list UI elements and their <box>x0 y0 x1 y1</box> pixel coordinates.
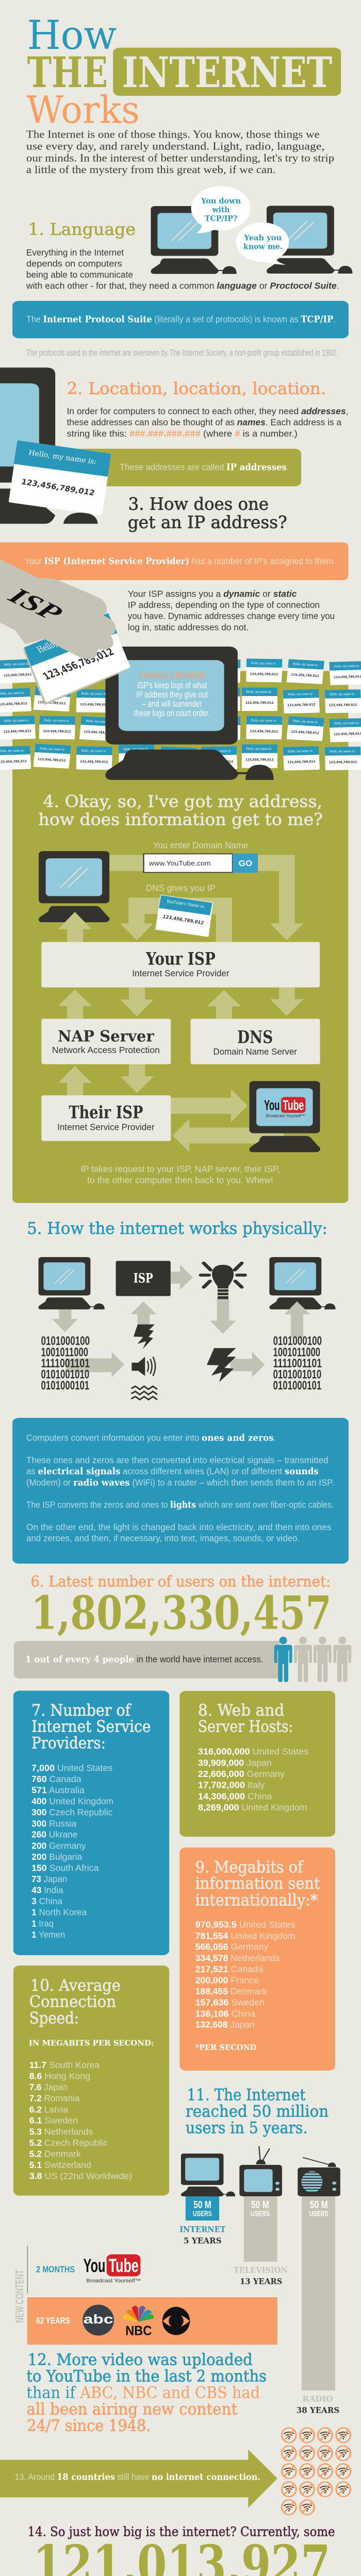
name tag wall: Hello, my name is: <box>293 719 318 724</box>
name tag wall: 123,456,789,012 <box>245 701 273 705</box>
text: dynamic or static: log in, static addresses do not. <box>128 622 249 633</box>
name tag wall: 123,456,789,012 <box>250 729 278 733</box>
heading: 12. video: all been airing new content <box>26 2400 238 2418</box>
callout: TCP/IP: The Internet Protocol Suite (literally a set of protocols) is known as TCP/IP. <box>26 314 336 325</box>
box: their ISP: Internet Service Provider <box>57 1122 155 1132</box>
small name tag: YouTube: YouTube's Name is: <box>166 899 206 909</box>
name tag wall: 123,456,789,012 <box>208 730 236 734</box>
icon: light bulb <box>201 1263 245 1299</box>
name tag wall: Hello, my name is: <box>81 749 107 753</box>
icon: large computer and name tag: Hello, my name is: <box>28 448 97 466</box>
binary left: 0101000100 <box>41 1334 90 1348</box>
panel: 9. megabits: 970,953.5 United States <box>195 1920 295 1930</box>
panel: 7. ISPs: 1 Yemen <box>31 1930 65 1940</box>
text: language: with each other - for that, they need a common language or Proctocol Suite. <box>26 281 339 291</box>
panel: how it works explanation: Computers convert information you enter into ones and zeros. <box>26 1433 276 1443</box>
panel: 9. megabits: 217,521 Canada <box>195 1964 263 1974</box>
heading: 12. video: 12. More video was uploaded <box>28 2350 253 2369</box>
callout: ISP <box>0 543 348 580</box>
panel: 7. ISPs: 260 Ukrane <box>31 1829 77 1840</box>
name tag wall: 123,456,789,012 <box>38 700 66 705</box>
panel: 10. connection speed: 11.7 South Korea <box>29 2060 100 2070</box>
name tag wall: 123,456,789,012 <box>0 701 27 706</box>
name tag wall: 123,456,789,012 <box>80 759 108 764</box>
panel: 10. connection speed: 5.2 Czech Republic <box>29 2138 108 2148</box>
panel: 10. connection speed: 8.6 Hong Kong <box>29 2071 90 2081</box>
panel: 9. megabits: 136,106 China <box>195 2009 256 2019</box>
name tag wall: Hello, my name is: <box>44 718 70 722</box>
icon: computer with YouTube logo: Broadcast Yourself™ <box>266 1114 305 1118</box>
bar: television 13 years <box>234 2146 288 2286</box>
text: language: being able to communicate <box>26 270 133 280</box>
name tag wall: 123,456,789,012 <box>43 729 71 733</box>
bar: internet 5 years: USERS <box>193 2209 212 2218</box>
icon: computer with YouTube logo: Tube <box>283 1097 304 1113</box>
chart: new content axis and YouTube row: Broadcast Yourself™ <box>86 2278 141 2284</box>
text: language: Everything in the Internet <box>26 248 124 258</box>
name tag wall: 123,456,789,012 <box>245 758 273 761</box>
binary left: 1111001101 <box>41 1357 90 1370</box>
icon: big computer with warning: IP address they give out <box>136 690 208 700</box>
name tag wall: Hello, my name is: <box>4 718 29 723</box>
panel: how it works explanation <box>12 1418 349 1564</box>
icon: left computer <box>39 1257 105 1310</box>
panel: 9. megabits: 9. Megabits of <box>195 1858 304 1876</box>
browser address bar: GO <box>238 859 252 868</box>
panel: 7. ISPs: 3 China <box>31 1896 63 1906</box>
panel: 9. megabits: 781,554 United Kingdom <box>195 1931 296 1941</box>
physical flow arrows <box>52 1265 265 1377</box>
panel: 10. connection speed: 6.2 Latvia <box>29 2105 69 2115</box>
name tag wall: 123,456,789,012 <box>3 729 31 734</box>
panel: 7. ISPs: Providers: <box>31 1734 106 1752</box>
illustration: two computers talking <box>151 186 352 274</box>
panel: 9. megabits: 566,056 Germany <box>195 1942 269 1952</box>
callout: IP addresses <box>55 449 301 486</box>
flow arrows <box>58 855 303 1152</box>
icon: big computer with warning: ISP's keep logs of what <box>137 681 207 690</box>
illustration: two computers talking: TCP/IP? <box>205 214 237 223</box>
box: NAP server: NAP Server <box>58 1028 155 1045</box>
name tag wall: Hello, my name is: <box>288 749 313 753</box>
name tag wall: 123,456,789,012 <box>250 672 278 676</box>
heading: 1. Language: 1. Language <box>28 220 136 239</box>
icon: big computer with warning: CRIMINALS BEWARE! <box>139 671 205 681</box>
caption: whew <box>80 1164 280 1185</box>
binary right: 1111001101 <box>273 1357 322 1370</box>
label: you enter domain name: You enter Domain Name <box>153 840 248 851</box>
panel: 7. ISPs: 1 Iraq <box>31 1919 54 1929</box>
icon: big computer with warning <box>105 647 274 780</box>
bar: radio 38 years: RADIO <box>302 2394 333 2404</box>
box: ISP <box>116 1261 171 1296</box>
panel: 7. ISPs: 150 South Africa <box>31 1863 99 1873</box>
caption: whew: to the other computer then back to you. Whew! <box>87 1175 273 1185</box>
panel: 7. ISPs: 7. Number of <box>31 1701 132 1720</box>
name tag wall: Hello, my name is: <box>40 689 65 694</box>
panel: 8. hosts <box>179 1691 335 1837</box>
heading: 3. How does one get an IP address?: 3. How does one <box>128 495 269 514</box>
name tag wall: 123,456,789,012 <box>84 730 112 735</box>
panel: 9. megabits: 200,000 France <box>195 1975 259 1986</box>
name tag wall: 123,456,789,012 <box>123 758 151 762</box>
panel: 8. hosts: 39,909,000 Japan <box>198 1758 272 1768</box>
intro text <box>26 129 334 176</box>
binary right <box>273 1334 322 1393</box>
illustration: two computers talking: Yeah you <box>244 234 282 243</box>
panel: 7. ISPs: 571 Australia <box>31 1785 85 1795</box>
icon: small lightning bolt <box>134 1325 155 1349</box>
name tag wall: 123,456,789,012 <box>291 672 319 678</box>
panel: 7. ISPs: 300 Russia <box>31 1819 77 1829</box>
box: your ISP: Your ISP <box>145 949 216 969</box>
name tag wall: 123,456,789,012 <box>205 759 233 764</box>
title: Works <box>26 89 140 132</box>
icon: large lightning bolt <box>207 1348 236 1382</box>
heading: 12. video: than if ABC, NBC and CBS had <box>26 2383 260 2402</box>
name tag wall: 123,456,789,012 <box>287 702 316 707</box>
name tag wall: Hello, my name is: <box>81 691 107 696</box>
name tag wall: Hello, my name is: <box>0 749 24 753</box>
text: language: depends on computers <box>26 259 122 269</box>
name tag wall: Hello, my name is: <box>0 690 25 696</box>
bar: television 13 years: TELEVISION <box>234 2265 288 2275</box>
panel: 7. ISPs: 200 Germany <box>31 1841 86 1851</box>
browser address bar <box>144 854 258 873</box>
icon: computer with YouTube logo <box>249 1081 320 1152</box>
text: dynamic or static: Your ISP assigns you a dynamic or static <box>128 589 297 599</box>
name tag wall: 123,456,789,012 <box>163 759 192 765</box>
panel: 7. ISPs: 1 North Korea <box>31 1907 87 1918</box>
icon: radio waves <box>131 1386 157 1400</box>
box: NAP server <box>41 1019 171 1064</box>
icon: four people <box>274 1637 351 1682</box>
box: your ISP <box>41 942 320 988</box>
panel: 9. megabits: 334,578 Netherlands <box>195 1953 280 1963</box>
heading: 11. 50 million users: users in 5 years. <box>186 2119 307 2137</box>
caption: whew: IP takes request to your ISP, NAP server, their ISP, <box>80 1164 280 1174</box>
bar: internet 5 years: INTERNET <box>179 2225 226 2234</box>
panel: 7. ISPs: Internet Service <box>31 1717 151 1736</box>
heading: 11. 50 million users: 11. The Internet <box>187 2086 306 2104</box>
box: DNS: DNS <box>237 1027 273 1047</box>
chart: 62 years networks row: abc <box>84 2313 113 2327</box>
callout: 1 in 4 people <box>14 1641 280 1679</box>
label: DNS gives you IP: DNS gives you IP <box>146 883 216 893</box>
text: location <box>67 406 348 439</box>
panel: 10. connection speed: Connection <box>29 1992 116 2011</box>
panel: 8. hosts: 14,306,000 China <box>198 1791 272 1802</box>
panel: 7. ISPs: 73 Japan <box>31 1874 67 1884</box>
title: How <box>27 12 117 59</box>
name tag wall: 123,456,789,012 <box>287 759 316 764</box>
icon: right computer <box>269 1257 336 1338</box>
panel: 8. hosts: 316,000,000 United States <box>198 1747 308 1757</box>
arrow: 13. countries <box>0 2449 277 2508</box>
browser address bar: www.YouTube.com <box>149 860 210 867</box>
box: their ISP: Their ISP <box>69 1103 143 1123</box>
name tag wall: 123,456,789,012 <box>38 757 66 762</box>
illustration: ISP hand giving a name tag: Hello, <box>35 639 59 655</box>
panel: 7. ISPs: 7,000 United States <box>31 1763 112 1773</box>
name tag wall: Hello, my name is: <box>40 747 65 752</box>
bar: radio 38 years: 50 M <box>310 2199 328 2211</box>
panel: 9. megabits: 132,608 Japan <box>195 2020 255 2030</box>
panel: 9. megabits <box>179 1848 335 2071</box>
chart: new content axis and YouTube row: 2 MONTHS <box>36 2264 75 2275</box>
illustration: two computers talking: You down <box>201 197 241 206</box>
bar: radio 38 years <box>297 2158 340 2415</box>
icon: speaker <box>132 1357 155 1376</box>
panel: 7. ISPs: 760 Canada <box>31 1774 81 1784</box>
panel: 8. hosts: 17,702,000 Italy <box>198 1780 265 1790</box>
callout: IP addresses: These addresses are called IP addresses. <box>120 462 289 472</box>
icon: large computer and name tag: 123,456,789,012 <box>20 478 96 498</box>
heading: 4. Okay <box>39 792 323 829</box>
name tag wall: Hello, my name is: <box>209 719 235 723</box>
box: DNS <box>191 1019 320 1064</box>
title: THE <box>27 48 108 97</box>
bar: internet 5 years: 50 M <box>193 2199 211 2211</box>
icons: no wifi grid <box>282 2428 350 2515</box>
panel: how it works explanation: as electrical signals across different wires (LAN) or of different sounds <box>26 1466 319 1477</box>
panel: 10. connection speed: 10. Average <box>30 1976 121 1995</box>
small name tag: YouTube <box>156 895 212 936</box>
binary left: 0101001010 <box>41 1367 89 1381</box>
name tag wall: 123,456,789,012 <box>208 672 236 676</box>
panel: 10. connection speed: 5.2 Denmark <box>29 2149 81 2159</box>
chart: new content axis and YouTube row: NEW CONTENT <box>13 2270 26 2323</box>
panel: 10. connection speed: 7.2 Romania <box>29 2093 80 2104</box>
name tag wall: Hello, my name is: <box>247 690 272 694</box>
panel: 10. connection speed: IN MEGABITS PER SECOND: <box>29 2039 154 2048</box>
illustration: ISP hand giving a name tag: 123,456,789,012 <box>41 646 117 683</box>
panel: 10. connection speed: Speed: <box>29 2009 79 2027</box>
name tag wall: Hello, my name is: <box>206 749 231 753</box>
bar: television 13 years: 50 M <box>251 2199 269 2211</box>
arrow: 13. countries: 13. Around 18 countries still have no internet connection. <box>15 2471 260 2482</box>
heading: 3. How does one get an IP address? <box>128 495 287 532</box>
chart: 62 years networks row: 62 YEARS <box>36 2315 70 2326</box>
title <box>26 12 341 132</box>
box: DNS: Domain Name Server <box>213 1047 297 1057</box>
panel: 10. connection speed <box>13 1965 169 2196</box>
illustration: ISP hand giving a name tag: ISP <box>3 583 68 626</box>
heading: 3. How does one get an IP address?: get an IP address? <box>128 513 287 532</box>
text: location: string like this: ###.###.###.### (where # is a number.) <box>67 429 298 439</box>
panel: 8. hosts: 8. Web and <box>198 1701 284 1720</box>
heading: 12. video <box>26 2350 267 2435</box>
binary left: 0101000101 <box>41 1379 89 1393</box>
illustration: ISP hand giving a name tag <box>0 560 130 705</box>
name tag wall: 123,456,789,012 <box>291 730 319 735</box>
panel: 10. connection speed: 5.3 Netherlands <box>29 2127 93 2137</box>
name tag wall: Hello, my name is: <box>247 747 272 751</box>
callout: 1 in 4 people: 1 out of every 4 people in the world have internet access. <box>25 1654 263 1665</box>
name tag wall: Hello, my name is: <box>293 662 318 667</box>
chart: new content axis and YouTube row: You <box>84 2256 105 2276</box>
panel: 7. ISPs: 200 Bulgaria <box>31 1852 83 1862</box>
name tag wall: Hello, my name is: <box>251 718 276 722</box>
intro text: a little of the mystery from this great web, if we can. <box>26 164 275 176</box>
heading: 12. video: to YouTube in the last 2 months <box>26 2367 267 2385</box>
icon: computer with YouTube logo: You <box>264 1097 280 1113</box>
name tag wall <box>0 658 361 771</box>
panel: 7. ISPs <box>13 1691 169 1955</box>
name tag wall: Hello, my name is: <box>86 719 111 724</box>
bar: television 13 years: USERS <box>251 2209 270 2218</box>
icon: large computer and name tag <box>0 367 110 524</box>
icon: big computer with warning: – and will surrender <box>142 699 202 709</box>
name tag wall: Hello, my name is: <box>123 747 149 751</box>
panel: 7. ISPs: 43 India <box>31 1885 63 1895</box>
name tag wall: Hello, my name is: <box>251 661 276 665</box>
text: location: these addresses can also be thought of as names. Each address is a <box>67 417 342 428</box>
illustration: two computers talking: with <box>212 206 230 214</box>
heading: 12. video: 24/7 since 1948. <box>27 2416 151 2435</box>
panel: 10. connection speed: 3.8 US (22nd Worldwide) <box>29 2171 132 2181</box>
name tag wall: Hello, my name is: <box>4 662 29 667</box>
intro text: use every day, and rarely understand. Light, radio, language, <box>26 141 324 152</box>
panel: 8. hosts: 8,269,000 United Kingdom <box>198 1803 307 1812</box>
binary left <box>41 1334 90 1393</box>
panel: 8. hosts: 22,606,000 Germany <box>198 1769 285 1779</box>
chart: 62 years networks row <box>27 2297 277 2345</box>
chart: new content axis and YouTube row <box>13 2246 141 2323</box>
name tag wall: 123,456,789,012 <box>80 702 108 706</box>
bar: internet 5 years: 5 YEARS <box>184 2236 222 2246</box>
icon: your computer <box>39 851 110 942</box>
name tag wall: Hello, my name is: <box>288 692 313 696</box>
panel: 7. ISPs: 400 United Kingdom <box>31 1797 113 1806</box>
panel: 10. connection speed: 5.1 Switzerland <box>29 2160 91 2170</box>
box: their ISP <box>41 1095 171 1141</box>
panel: 10. connection speed: 6.1 Sweden <box>29 2115 78 2126</box>
small name tag: YouTube: 123,456,789,012 <box>162 914 204 926</box>
bar: radio 38 years: 38 YEARS <box>297 2405 339 2415</box>
name tag wall: Hello, my name is: <box>209 662 235 666</box>
bar: television 13 years: 13 YEARS <box>240 2277 283 2286</box>
name tag wall: 123,456,789,012 <box>4 672 32 677</box>
name tag wall: Hello, my name is: <box>209 690 234 694</box>
panel: 9. megabits: 188,455 Denmark <box>195 1987 268 1996</box>
panel: 9. megabits: *PER SECOND <box>195 2043 256 2052</box>
callout: TCP/IP <box>12 301 349 338</box>
panel: 7. ISPs: 300 Czech Republic <box>31 1807 112 1818</box>
chart: 62 years networks row: NBC <box>125 2323 152 2338</box>
icon: big computer with warning: these logs on court order. <box>134 708 210 718</box>
binary left: 1001011000 <box>41 1345 88 1359</box>
name tag wall: Hello, my name is: <box>165 749 191 754</box>
bar: internet 5 years <box>179 2154 235 2246</box>
bar: radio 38 years: USERS <box>309 2209 329 2218</box>
panel: section 4 background <box>12 671 348 1203</box>
chart: new content axis and YouTube row: Tube <box>109 2256 139 2276</box>
illustration: two computers talking: know me. <box>243 243 283 251</box>
panel: 10. connection speed: 7.6 Japan <box>29 2082 68 2092</box>
box: ISP: ISP <box>134 1270 153 1286</box>
panel: 9. megabits: 157,636 Sweden <box>195 1997 265 2008</box>
box: NAP server: Network Access Protection <box>52 1045 160 1055</box>
panel: 8. hosts: Server Hosts: <box>198 1717 293 1736</box>
name tag wall: 123,456,789,012 <box>208 701 236 705</box>
text: language <box>26 248 339 291</box>
box: your ISP: Internet Service Provider <box>132 969 229 978</box>
text: dynamic or static <box>128 589 335 633</box>
heading: 11. 50 million users <box>186 2086 329 2137</box>
